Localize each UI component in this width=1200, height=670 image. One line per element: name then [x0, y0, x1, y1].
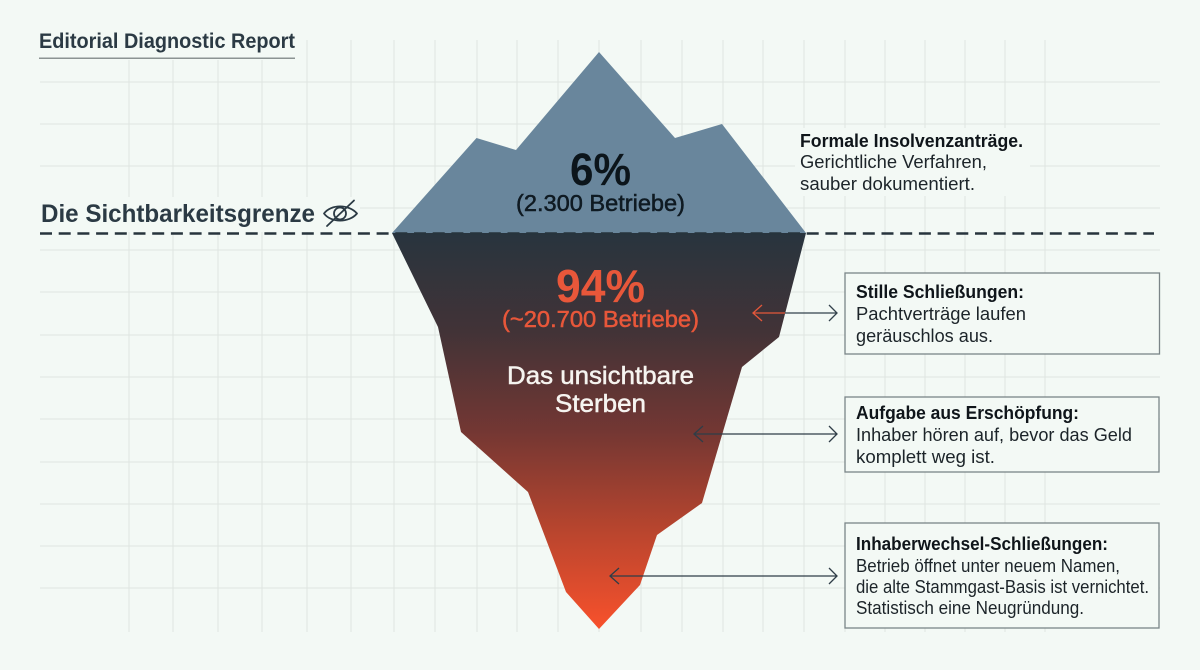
stat: 6 percent: (2.300 Betriebe) [516, 190, 685, 216]
heading: the invisible dying: Das unsichtbare [507, 362, 694, 390]
panel: silent closures: Pachtverträge laufen [856, 303, 1026, 324]
arrow: exhaustion [694, 426, 837, 442]
panel: silent closures: Stille Schließungen: [856, 281, 1024, 302]
heading: the invisible dying: Sterben [555, 390, 646, 418]
header: report title: Editorial Diagnostic Report [39, 30, 295, 53]
arrow: silent closures [753, 305, 837, 321]
text block: formal insolvency filings: Gerichtliche Verfahren, [800, 151, 987, 172]
panel: owner change closures: die alte Stammgast-Basis ist vernichtet. [856, 577, 1149, 597]
panel: owner change closures [845, 523, 1159, 628]
panel: giving up from exhaustion: Inhaber hören auf, bevor das Geld [856, 424, 1132, 445]
stat: 94 percent: 94% [556, 260, 645, 312]
panel: giving up from exhaustion: komplett weg ist. [856, 446, 995, 467]
stat: 94 percent [502, 260, 699, 332]
text block: formal insolvency filings: Formale Insolvenzanträge. [800, 130, 1023, 151]
text block: formal insolvency filings [800, 130, 1023, 194]
stat: 94 percent: (~20.700 Betriebe) [502, 306, 699, 332]
text block: formal insolvency filings: sauber dokumentiert. [800, 173, 975, 194]
icon: crossed-out eye [324, 200, 357, 226]
visibility line: dashed [40, 232, 1154, 235]
panel: giving up from exhaustion: Aufgabe aus Erschöpfung: [856, 402, 1079, 423]
heading: the invisible dying [507, 362, 694, 418]
panel: owner change closures: Inhaberwechsel-Schließungen: [856, 533, 1108, 554]
panel: owner change closures: Statistisch eine Neugründung. [856, 598, 1084, 618]
stat: 6 percent: 6% [570, 144, 631, 195]
panel: giving up from exhaustion [845, 397, 1159, 472]
panel: silent closures [845, 273, 1160, 354]
label: visibility boundary: Die Sichtbarkeitsgrenze [41, 200, 315, 228]
panel: owner change closures: Betrieb öffnet unter neuem Namen, [856, 556, 1120, 576]
iceberg [392, 52, 806, 629]
arrow: owner change [610, 568, 837, 584]
iceberg body below waterline [392, 233, 806, 629]
stat: 6 percent [516, 144, 685, 216]
panel: silent closures: geräuschlos aus. [856, 325, 993, 346]
iceberg tip above waterline [392, 52, 806, 233]
